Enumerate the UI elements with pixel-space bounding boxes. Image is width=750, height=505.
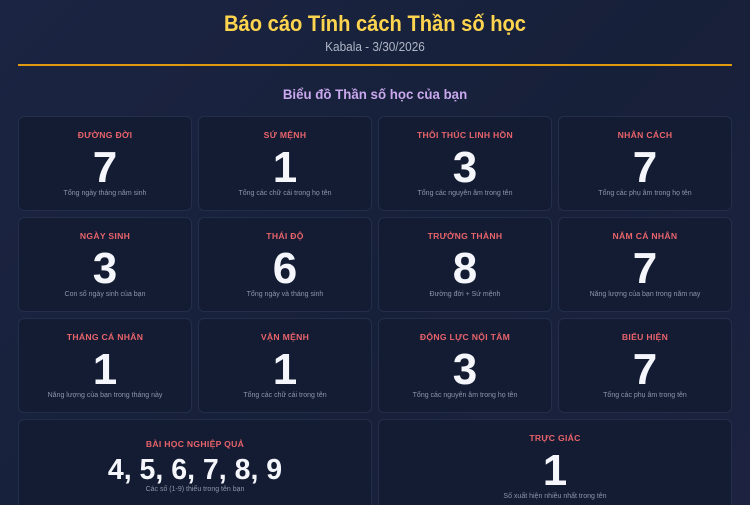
panel: Đường đời — [18, 116, 192, 211]
panel: Động lực nội tâm — [378, 318, 552, 413]
panel: Tháng cá nhân: THÁNG CÁ NHÂN — [67, 332, 143, 342]
panel: Trực giác: Số xuất hiện nhiều nhất trong tên — [503, 493, 607, 500]
panel: Nhân cách: Tổng các phụ âm trong họ tên — [598, 190, 692, 197]
panel: Nhân cách: NHÂN CÁCH — [618, 130, 672, 140]
panel: Đường đời: Tổng ngày tháng năm sinh — [64, 190, 146, 197]
panel: Trưởng thành: TRƯỞNG THÀNH — [428, 230, 502, 240]
panel: Bài học nghiệp quả: 4, 5, 6, 7, 8, 9 — [108, 454, 282, 486]
panel: Thái độ: Tổng ngày và tháng sinh — [247, 291, 323, 298]
panel: Sứ mệnh: 1 — [273, 143, 297, 192]
panel: Vận mệnh — [198, 318, 372, 413]
panel: Trưởng thành — [378, 217, 552, 312]
panel: Ngày sinh: NGÀY SINH — [80, 230, 130, 240]
panel: Tháng cá nhân: 1 — [93, 345, 117, 394]
panel: Năm cá nhân: Năng lượng của bạn trong năm nay — [590, 291, 700, 298]
panel: Vận mệnh: 1 — [273, 345, 297, 394]
panel: Ngày sinh — [18, 217, 192, 312]
panel: Nhân cách: 7 — [633, 143, 657, 192]
panel: Sứ mệnh: SỨ MỆNH — [264, 130, 306, 140]
panel: Ngày sinh: Con số ngày sinh của bạn — [65, 291, 145, 298]
panel: Biểu hiện: BIỂU HIỆN — [622, 332, 668, 342]
panel: Động lực nội tâm: Tổng các nguyên âm trong họ tên — [413, 392, 517, 399]
subtitle: name and date: Kabala - 3/30/2026 — [325, 40, 425, 54]
section heading: Biểu đồ Thần số học của bạn — [283, 86, 467, 102]
panel: Đường đời: 7 — [93, 143, 117, 192]
panel: Thôi thúc linh hồn: Tổng các nguyên âm trong tên — [418, 190, 512, 197]
panel: Vận mệnh: VẬN MỆNH — [261, 332, 309, 342]
panel: Thái độ: 6 — [273, 244, 297, 293]
panel: Thôi thúc linh hồn — [378, 116, 552, 211]
panel: Vận mệnh: Tổng các chữ cái trong tên — [243, 392, 327, 399]
panel: Trưởng thành: Đường đời + Sứ mệnh — [430, 291, 500, 298]
panel: Thôi thúc linh hồn: THÔI THÚC LINH HỒN — [417, 130, 513, 140]
panel: Năm cá nhân: NĂM CÁ NHÂN — [613, 230, 677, 240]
panel: Sứ mệnh — [198, 116, 372, 211]
panel: Ngày sinh: 3 — [93, 244, 117, 293]
panel: Trực giác: TRỰC GIÁC — [529, 432, 581, 442]
panel: Bài học nghiệp quả — [18, 419, 372, 505]
panel: Biểu hiện: 7 — [633, 345, 657, 394]
panel: Thôi thúc linh hồn: 3 — [453, 143, 477, 192]
panel: Tháng cá nhân: Năng lượng của bạn trong tháng này — [48, 392, 162, 399]
panel: Sứ mệnh: Tổng các chữ cái trong họ tên — [238, 190, 332, 197]
panel: Động lực nội tâm: ĐỘNG LỰC NỘI TÂM — [420, 332, 510, 342]
panel: Nhân cách — [558, 116, 732, 211]
panel: Biểu hiện: Tổng các phụ âm trong tên — [603, 392, 687, 399]
panel: Tháng cá nhân — [18, 318, 192, 413]
header divider — [18, 64, 732, 66]
panel: Thái độ — [198, 217, 372, 312]
panel: Trực giác: 1 — [543, 446, 567, 495]
panel: Trực giác — [378, 419, 732, 505]
panel: Thái độ: THÁI ĐỘ — [266, 230, 304, 240]
panel: Động lực nội tâm: 3 — [453, 345, 477, 394]
panel: Biểu hiện — [558, 318, 732, 413]
panel: Bài học nghiệp quả: BÀI HỌC NGHIỆP QUẢ — [146, 438, 244, 448]
panel: Năm cá nhân: 7 — [633, 244, 657, 293]
panel: Đường đời: ĐƯỜNG ĐỜI — [78, 130, 132, 140]
panel: Năm cá nhân — [558, 217, 732, 312]
panel: Bài học nghiệp quả: Các số (1-9) thiếu trong tên bạn — [146, 486, 244, 493]
panel: Trưởng thành: 8 — [453, 244, 477, 293]
title: Báo cáo Tính cách Thần số học — [224, 10, 526, 36]
